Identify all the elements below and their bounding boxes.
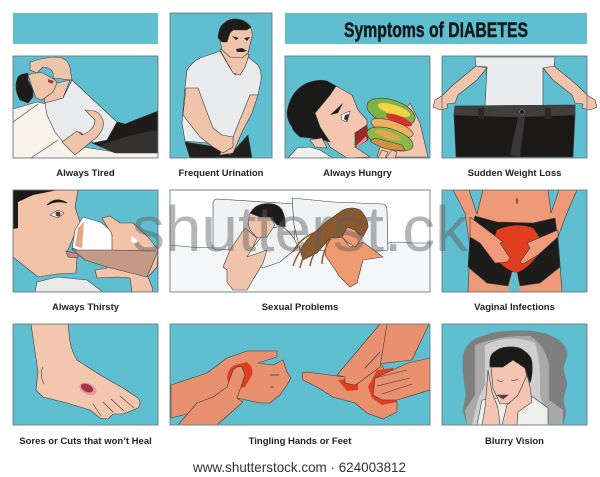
label: tingling hands or feet: Tingling Hands or Feet bbox=[249, 436, 352, 447]
watermark: shutterst.ck bbox=[132, 193, 469, 265]
illustration: oversized trousers bbox=[433, 57, 597, 157]
panel: sudden weight loss bbox=[433, 56, 597, 158]
label: always hungry: Always Hungry bbox=[323, 168, 393, 179]
label: always thirsty: Always Thirsty bbox=[52, 302, 120, 313]
panel: blurry vision bbox=[442, 324, 587, 425]
panel: always hungry bbox=[285, 56, 430, 158]
panel: vaginal infections bbox=[442, 190, 587, 292]
label: frequent urination: Frequent Urination bbox=[179, 168, 264, 179]
illustration: couple in bed bbox=[170, 190, 430, 290]
panel: frequent urination bbox=[170, 13, 272, 158]
label: sores or cuts: Sores or Cuts that won’t Heal bbox=[19, 436, 152, 447]
label: sudden weight loss: Sudden Weight Loss bbox=[468, 168, 561, 179]
illustration: massaged foot bbox=[302, 324, 430, 419]
panel: tingling hands or feet bbox=[170, 324, 430, 425]
panel: sores or cuts bbox=[13, 324, 158, 425]
panel: always thirsty bbox=[13, 190, 158, 292]
illustration: foot with sore bbox=[31, 324, 140, 419]
panel: always tired bbox=[13, 56, 158, 158]
illustration: massaged hand bbox=[171, 324, 430, 425]
illustration: man lying down bbox=[13, 57, 158, 158]
illustration: lower torso with hands bbox=[453, 190, 577, 292]
illustration: man eating burger bbox=[287, 80, 428, 158]
title: Symptoms of DIABETES bbox=[344, 19, 528, 42]
footer: image url and id: www.shutterstock.com · 624003812 bbox=[192, 459, 406, 475]
title banner bbox=[285, 13, 587, 44]
panel: sexual problems bbox=[170, 190, 430, 292]
label: sexual problems: Sexual Problems bbox=[262, 302, 338, 313]
illustration: person with blurred halo bbox=[463, 331, 567, 425]
label: always tired: Always Tired bbox=[56, 168, 115, 179]
illustration: man drinking water bbox=[13, 190, 158, 292]
blank teal banner bbox=[13, 13, 158, 44]
label: blurry vision: Blurry Vision bbox=[485, 436, 544, 447]
illustration: man holding groin bbox=[182, 19, 261, 158]
label: vaginal infections: Vaginal Infections bbox=[474, 302, 555, 313]
